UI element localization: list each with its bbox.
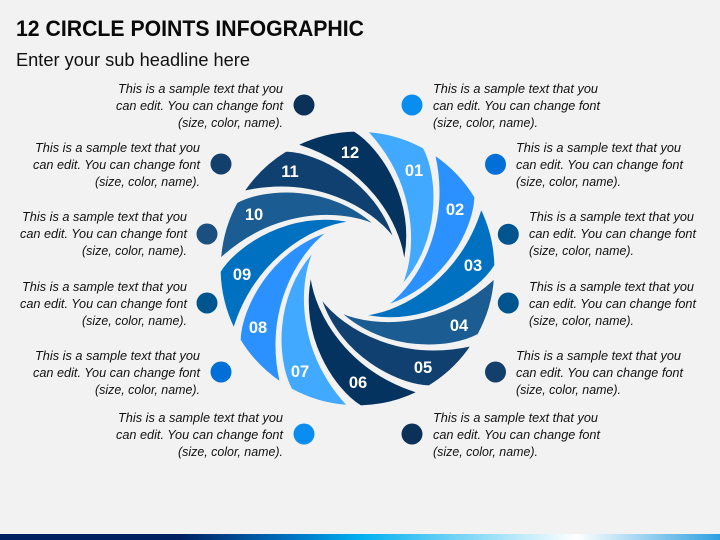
text block 12: [116, 82, 284, 130]
text block 10: [20, 210, 188, 258]
text block 06: This is a sample text that you: [433, 411, 598, 425]
text block 05: (size, color, name).: [516, 383, 621, 397]
text block 09: (size, color, name).: [82, 314, 187, 328]
dot right 5: [485, 362, 506, 382]
text block 03: This is a sample text that you: [529, 210, 694, 224]
blade 01: [368, 132, 434, 286]
blade 08: 08: [249, 319, 267, 337]
text block 07: can edit. You can change font: [116, 428, 284, 442]
dot left 11: [210, 154, 232, 174]
blade 12: [298, 112, 432, 278]
text block 09: [20, 280, 188, 328]
text block 07: (size, color, name).: [178, 445, 283, 459]
blade 09: [201, 194, 367, 328]
text block 12: This is a sample text that you: [118, 82, 283, 96]
dot right 2: [485, 154, 506, 175]
text block 08: [33, 349, 201, 397]
text block 09: This is a sample text that you: [22, 280, 187, 294]
text block 12: can edit. You can change font: [116, 99, 284, 113]
text block 04: (size, color, name).: [529, 314, 634, 328]
blade 07: 07: [291, 363, 309, 381]
text block 02: This is a sample text that you: [516, 141, 681, 155]
text block 07: [116, 411, 284, 459]
blade 01: 01: [405, 162, 423, 180]
dot left 10: [196, 224, 218, 244]
dot top right 1: [402, 94, 422, 116]
text block 11: (size, color, name).: [95, 175, 200, 189]
text block 12: (size, color, name).: [178, 116, 283, 130]
text block 04: can edit. You can change font: [529, 297, 697, 311]
text block 07: This is a sample text that you: [118, 411, 283, 425]
blade 02: 02: [446, 201, 464, 219]
blade 11: 11: [281, 163, 299, 181]
text block 02: (size, color, name).: [516, 175, 621, 189]
text block 11: [33, 141, 201, 189]
dot top left 12: [294, 94, 314, 116]
text block 01: This is a sample text that you: [433, 82, 598, 96]
text block 01: (size, color, name).: [433, 116, 538, 130]
text block 09: can edit. You can change font: [20, 297, 188, 311]
blade 04: [340, 278, 494, 345]
blade 04: 04: [450, 317, 469, 335]
text block 03: can edit. You can change font: [529, 227, 697, 241]
blade 06: [283, 259, 417, 425]
blade 10: 10: [245, 206, 263, 224]
text block 05: can edit. You can change font: [516, 366, 684, 380]
blade 10: [220, 192, 374, 258]
blade 09: 09: [233, 266, 251, 284]
blade 12: 12: [341, 144, 359, 162]
circular diagram: [201, 112, 514, 425]
subtitle: Enter your sub headline here: [16, 50, 250, 70]
text block 06: [433, 411, 601, 459]
blade 07: [281, 252, 348, 406]
text block 08: can edit. You can change font: [33, 366, 201, 380]
blade 02: [358, 155, 492, 322]
dot bottom right 6: [402, 424, 422, 444]
text block 06: (size, color, name).: [433, 445, 538, 459]
text block 05: This is a sample text that you: [516, 349, 681, 363]
blade 03: [348, 209, 514, 343]
blade 11: [244, 134, 411, 268]
text block 10: This is a sample text that you: [22, 210, 187, 224]
blade 05: [304, 269, 471, 403]
text block 04: This is a sample text that you: [529, 280, 694, 294]
text block 10: can edit. You can change font: [20, 227, 188, 241]
text block 03: [529, 210, 697, 258]
blade 06: 06: [349, 374, 367, 392]
dot left 9: [196, 292, 218, 314]
blade 03: 03: [464, 257, 482, 275]
dot right 3: [498, 224, 519, 245]
blade 08: [223, 215, 357, 382]
text block 01: can edit. You can change font: [433, 99, 601, 113]
dot bottom left 7: [294, 424, 314, 444]
dot left 8: [210, 362, 232, 382]
text block 06: can edit. You can change font: [433, 428, 601, 442]
text block 08: This is a sample text that you: [35, 349, 200, 363]
bottom gradient bar: [0, 534, 720, 540]
blade 05: 05: [414, 359, 432, 377]
text block 02: can edit. You can change font: [516, 158, 684, 172]
text block 05: [516, 349, 684, 397]
text block 04: [529, 280, 697, 328]
title: 12 CIRCLE POINTS INFOGRAPHIC: [16, 16, 364, 41]
text block 11: This is a sample text that you: [35, 141, 200, 155]
text block 11: can edit. You can change font: [33, 158, 201, 172]
text block 10: (size, color, name).: [82, 244, 187, 258]
text block 01: [433, 82, 601, 130]
text block 08: (size, color, name).: [95, 383, 200, 397]
dot right 4: [498, 292, 519, 314]
text block 02: [516, 141, 684, 189]
text block 03: (size, color, name).: [529, 244, 634, 258]
